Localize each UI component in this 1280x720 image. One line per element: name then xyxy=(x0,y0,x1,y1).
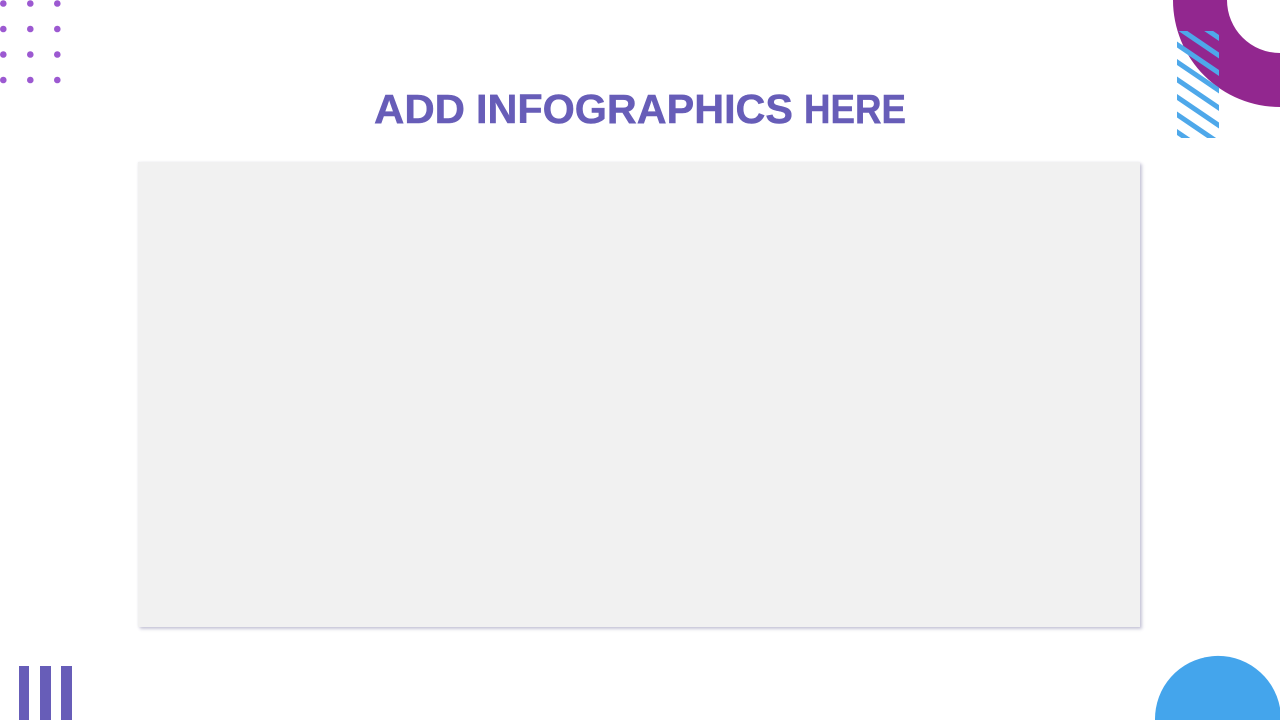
icon: blue circle bottom right xyxy=(1155,656,1280,720)
title: HERE xyxy=(804,86,906,132)
title: ADD xyxy=(374,86,465,132)
icon: dot grid top left xyxy=(0,0,61,83)
panel: infographic placeholder xyxy=(138,162,1140,627)
title: INFOGRAPHICS xyxy=(476,86,793,132)
icon: purple quarter ring top right xyxy=(1173,0,1280,107)
icon: purple vertical bars bottom left xyxy=(19,666,72,720)
icon: blue diagonal stripes top right xyxy=(1177,31,1219,138)
title xyxy=(374,86,906,132)
